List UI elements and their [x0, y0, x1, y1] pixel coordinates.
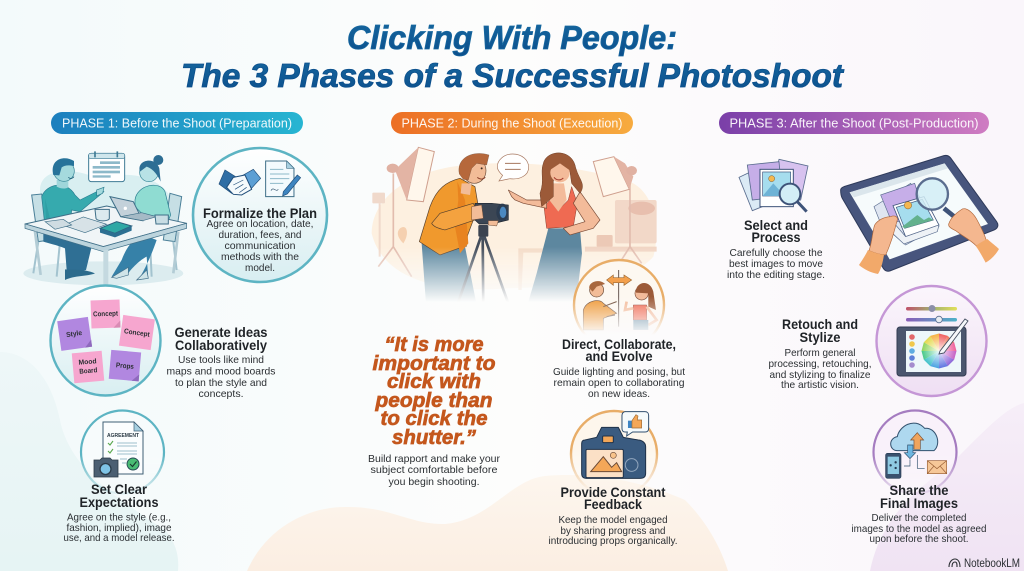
icon: handshake	[219, 169, 261, 195]
circle: formalize the plan	[193, 148, 327, 282]
sticky note: mood board: Mood	[78, 358, 97, 367]
heading: direct collaborate evolve: Direct, Collaborate,	[562, 336, 676, 352]
title	[181, 19, 845, 94]
body: direct collaborate evolve: on new ideas.	[588, 388, 650, 400]
circle: feedback icon	[548, 411, 678, 547]
right hand	[949, 209, 987, 246]
text: generate ideas: to plan the style and	[175, 377, 267, 389]
phase 3 heading pill	[719, 112, 989, 134]
text: generate ideas	[166, 324, 276, 400]
icon: smartphone	[886, 453, 901, 478]
heading: direct collaborate evolve: and Evolve	[586, 348, 653, 364]
panel: phase 1	[23, 112, 327, 544]
heading: set clear expectations	[80, 481, 159, 510]
text: select and process: into the editing stage.	[727, 269, 825, 281]
circle: share cloud icon	[852, 410, 987, 545]
title: The 3 Phases of a Successful Photoshoot	[181, 57, 845, 94]
body: set clear expectations: fashion, implied), image	[66, 522, 172, 534]
text: select and process: Process	[752, 229, 801, 245]
sticky note: mood board	[72, 351, 104, 383]
sticky note: mood board: Board	[79, 367, 98, 376]
phase 2 heading pill	[391, 112, 633, 134]
body: provide constant feedback: introducing props organically.	[548, 535, 678, 547]
icon: adjustment sliders	[906, 305, 957, 323]
title: Clicking With People:	[347, 19, 677, 56]
circle: retouch tablet icon	[876, 286, 986, 396]
panel: phase 2	[368, 112, 685, 547]
body: set clear expectations: Agree on the style (e.g.,	[67, 512, 171, 524]
body: formalize the plan: model.	[245, 262, 275, 274]
body: formalize the plan: duration, fees, and	[218, 229, 302, 241]
heading: set clear expectations: Set Clear	[91, 481, 148, 497]
quote supporting text: subject comfortable before	[370, 464, 498, 476]
heading: formalize the plan: Formalize the Plan	[203, 205, 317, 221]
text: generate ideas: Generate Ideas	[174, 324, 268, 340]
icon: camera	[94, 458, 118, 477]
phase 2 heading pill: PHASE 2: During the Shoot (Execution)	[402, 116, 622, 130]
heading: share the final images: Share the	[890, 482, 949, 498]
body: share the final images	[852, 512, 987, 545]
left hand	[869, 216, 897, 255]
heading: provide constant feedback	[560, 484, 666, 512]
quote: important to	[372, 353, 496, 375]
quote supporting text	[368, 453, 501, 488]
text: generate ideas: concepts.	[198, 388, 244, 400]
text: retouch and stylize	[768, 316, 872, 391]
quote: people than	[374, 390, 492, 412]
quote	[372, 334, 496, 449]
text: select and process: Carefully choose the	[730, 247, 823, 259]
heading: share the final images	[880, 482, 958, 511]
sticky note: props: Props	[116, 362, 134, 371]
phase 1 heading pill: PHASE 1: Before the Shoot (Preparation)	[62, 116, 292, 130]
quote: click with	[387, 371, 481, 393]
body: direct collaborate evolve: Guide lighting and posing, but	[553, 366, 685, 378]
body: set clear expectations	[64, 512, 174, 544]
tripod	[460, 236, 508, 300]
panel: phase 3	[719, 112, 999, 545]
body: formalize the plan	[206, 218, 314, 274]
text: retouch and stylize: processing, retouching,	[768, 358, 872, 370]
body: share the final images: images to the model as agreed	[852, 523, 987, 535]
quote: to click the	[380, 408, 488, 430]
heading: share the final images: Final Images	[880, 495, 958, 511]
circle: direct collaborate icon	[553, 260, 685, 400]
body: share the final images: Deliver the completed	[872, 512, 967, 524]
heading: provide constant feedback: Provide Constant	[560, 484, 666, 500]
sticky note: concept 2: Concept	[123, 328, 151, 339]
body: set clear expectations: use, and a model release.	[64, 532, 174, 544]
body: formalize the plan: methods with the	[221, 251, 299, 263]
circle: sticky notes	[50, 286, 160, 396]
illustration: planning meeting at a table	[23, 151, 187, 285]
icon: cloud with arrows	[891, 423, 938, 468]
body: provide constant feedback	[548, 514, 678, 547]
icon: envelope	[927, 461, 947, 474]
body: formalize the plan: Agree on location, date,	[206, 218, 314, 230]
sticky note: style: Style	[66, 330, 83, 339]
body: provide constant feedback: Keep the model engaged	[558, 514, 668, 526]
icon: tablet with colour wheel	[897, 319, 968, 376]
icon: signed document	[266, 161, 301, 197]
body: share the final images: upon before the shoot.	[870, 533, 968, 545]
camera	[475, 203, 508, 224]
text: retouch and stylize: the artistic vision.	[781, 379, 859, 391]
body: formalize the plan: communication	[224, 240, 296, 252]
body: direct collaborate evolve: remain open to collaborating	[554, 377, 685, 389]
text: generate ideas: Collaboratively	[175, 337, 267, 353]
body: provide constant feedback: by sharing progress and	[560, 525, 666, 537]
text: retouch and stylize: and stylizing to finalize	[770, 369, 871, 381]
text: generate ideas: maps and mood boards	[166, 366, 276, 378]
icon: photos with magnifier	[739, 159, 808, 212]
light stands	[378, 173, 642, 277]
text: select and process: Select and	[744, 217, 808, 233]
sticky note: concept: Concept	[93, 311, 119, 318]
illustration: photographer and model in studio	[372, 147, 657, 313]
quote: shutter.”	[392, 427, 476, 449]
heading: direct collaborate evolve	[562, 336, 676, 364]
icon: camera with photo	[582, 427, 646, 478]
quote: “It is more	[384, 334, 484, 356]
quote supporting text: you begin shooting.	[388, 476, 480, 488]
speech bubble	[497, 154, 529, 181]
icon: thumbs up bubble	[622, 412, 649, 436]
phase 1 heading pill	[51, 112, 303, 134]
text: retouch and stylize: Stylize	[800, 329, 841, 345]
text: retouch and stylize: Perform general	[784, 347, 856, 359]
man	[422, 244, 475, 299]
heading: set clear expectations: Expectations	[80, 494, 159, 510]
text: generate ideas: Use tools like mind	[178, 354, 264, 366]
body: direct collaborate evolve	[553, 366, 685, 400]
text: select and process: best images to move	[729, 258, 823, 270]
phase 3 heading pill: PHASE 3: After the Shoot (Post-Production)	[730, 116, 978, 130]
heading: provide constant feedback: Feedback	[584, 496, 642, 512]
studio props	[372, 193, 657, 290]
illustration: tablet with photos and magnifier	[841, 155, 999, 274]
woman	[530, 228, 582, 299]
icon: agreement document: AGREEMENT	[107, 433, 139, 439]
text: retouch and stylize: Retouch and	[782, 316, 858, 332]
text: select and process	[727, 217, 825, 281]
quote supporting text: Build rapport and make your	[368, 453, 501, 465]
circle: agreement icon	[64, 410, 174, 544]
